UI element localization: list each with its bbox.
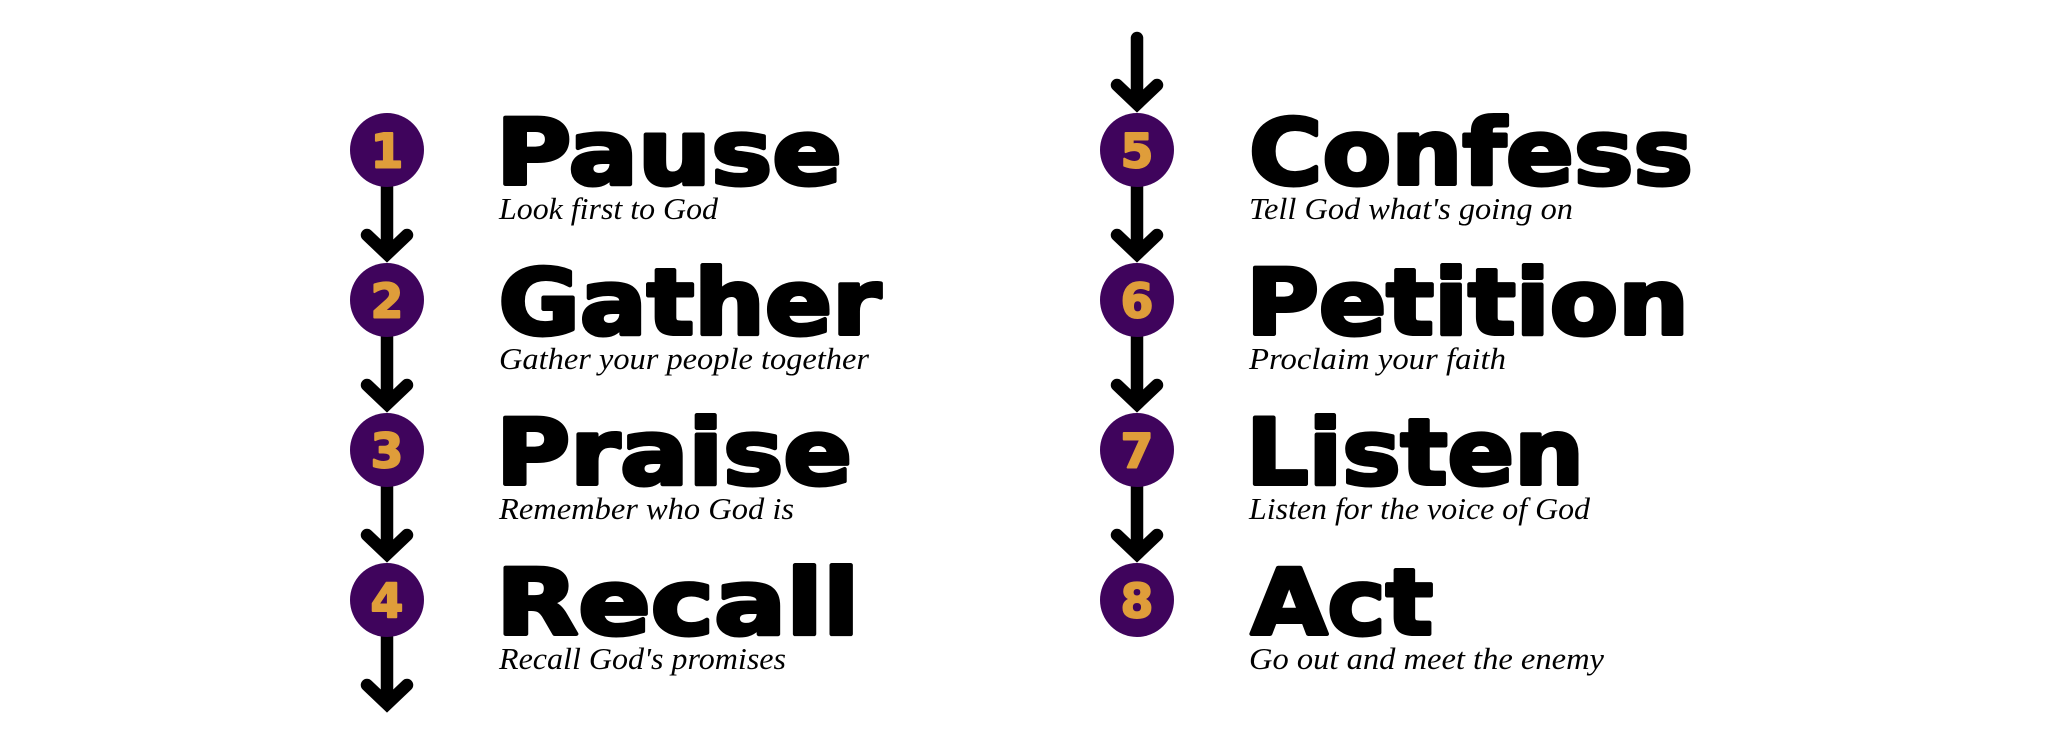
number badge 6	[1100, 263, 1174, 337]
subtitle: Gather your people together: Gather your people together	[499, 341, 870, 376]
heading: Act: Act	[1251, 551, 1433, 656]
step 6: Petition	[1100, 251, 1689, 376]
step 5: Confess	[1100, 101, 1693, 226]
number badge 8	[1100, 563, 1174, 637]
arrow: 5 to 6	[1117, 187, 1157, 254]
step 4: Recall	[350, 551, 860, 676]
number badge 7	[1100, 413, 1174, 487]
subtitle: Go out and meet the enemy: Go out and meet the enemy	[1249, 641, 1604, 676]
heading: Listen: Listen	[1246, 401, 1584, 506]
subtitle: Listen for the voice of God: Listen for the voice of God	[1248, 491, 1591, 526]
number badge 5: 5	[1121, 124, 1153, 180]
subtitle: Remember who God is: Remember who God is	[498, 491, 794, 526]
number badge 6: 6	[1121, 274, 1153, 330]
number badge 1	[350, 113, 424, 187]
heading: Pause: Pause	[496, 101, 842, 206]
arrow: into 5	[1117, 38, 1157, 104]
step 1: Pause	[350, 101, 842, 226]
number badge 2: 2	[371, 274, 403, 330]
subtitle: Tell God what's going on: Tell God what's going on	[1249, 191, 1573, 226]
subtitle: Proclaim your faith: Proclaim your faith	[1248, 341, 1506, 376]
arrow: 3 to 4	[367, 487, 407, 554]
heading: Petition: Petition	[1246, 251, 1689, 356]
heading: Praise: Praise	[496, 401, 852, 506]
number badge 4: 4	[371, 574, 403, 630]
number badge 8: 8	[1121, 574, 1153, 630]
arrow: 6 to 7	[1117, 337, 1157, 404]
arrow: 4 to next column	[367, 637, 407, 704]
step 3: Praise	[350, 401, 852, 526]
step 8: Act	[1100, 551, 1604, 676]
number badge 2	[350, 263, 424, 337]
heading: Recall: Recall	[496, 551, 860, 656]
step 2: Gather	[350, 251, 881, 376]
arrow: 1 to 2	[367, 187, 407, 254]
arrow: 7 to 8	[1117, 487, 1157, 554]
number badge 5	[1100, 113, 1174, 187]
number badge 1: 1	[371, 124, 403, 180]
number badge 7: 7	[1121, 424, 1153, 480]
subtitle: Look first to God: Look first to God	[498, 191, 719, 226]
number badge 4	[350, 563, 424, 637]
subtitle: Recall God's promises: Recall God's promises	[498, 641, 786, 676]
heading: Confess: Confess	[1249, 101, 1693, 206]
heading: Gather: Gather	[498, 251, 881, 356]
number badge 3	[350, 413, 424, 487]
step 7: Listen	[1100, 401, 1591, 526]
number badge 3: 3	[371, 424, 403, 480]
arrow: 2 to 3	[367, 337, 407, 404]
